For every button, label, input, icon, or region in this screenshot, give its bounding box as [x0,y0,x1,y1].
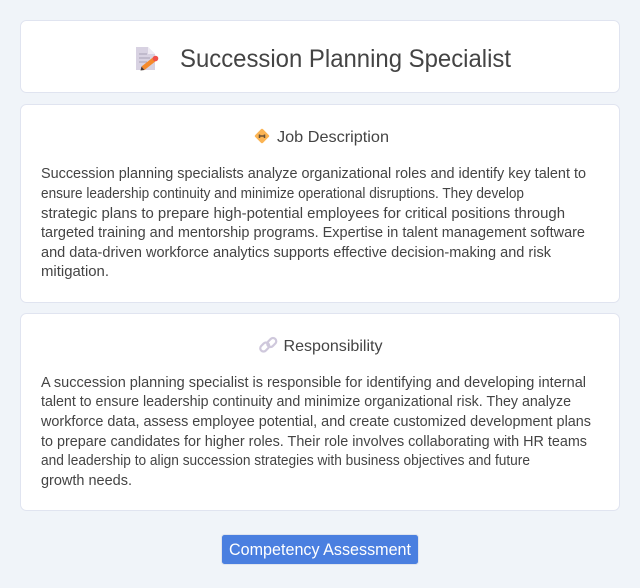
text block: job description: Succession planning specialists analyze organizational roles and identify key talent to [41,166,586,182]
text block: job description [41,166,586,280]
text block: responsibility: workforce data, assess employee potential, and create customized development plans [40,414,591,430]
text block: responsibility: growth needs. [41,473,132,489]
text block: responsibility [40,375,591,489]
panel: responsibility [20,314,620,510]
panel: title card [20,20,620,92]
button: competency assessment [222,534,418,564]
heading: responsibility: Responsibility [284,338,382,355]
text block: responsibility: A succession planning specialist is responsible for identifying and developing internal [41,375,586,391]
text block: responsibility: to prepare candidates for higher roles. Their role involves collaborating with HR teams [41,434,587,450]
text block: job description: and data-driven workforce analytics supports effective decision-making and risk [41,245,552,261]
text block: responsibility: and leadership to align succession strategies with business objectives and future [41,453,530,469]
panel: job description [20,104,620,302]
text block: job description: strategic plans to prepare high-potential employees for critical positions through [41,206,565,222]
text block: job description: mitigation. [41,264,109,280]
icon: document with pencil [136,47,158,70]
button: competency assessment: Competency Assessment [229,541,411,559]
heading: job description: Job Description [277,129,389,146]
text block: job description: ensure leadership continuity and minimize operational disruptions. They develop [41,186,524,202]
text block: responsibility: talent to ensure leadership continuity and minimize organizational risk. They analyze [41,394,571,410]
text block: job description: targeted training and mentorship programs. Expertise in talent management software [41,225,585,241]
icon: diamond road sign [254,128,270,144]
icon: chain link [259,337,278,353]
title: Succession Planning Specialist [180,45,511,73]
